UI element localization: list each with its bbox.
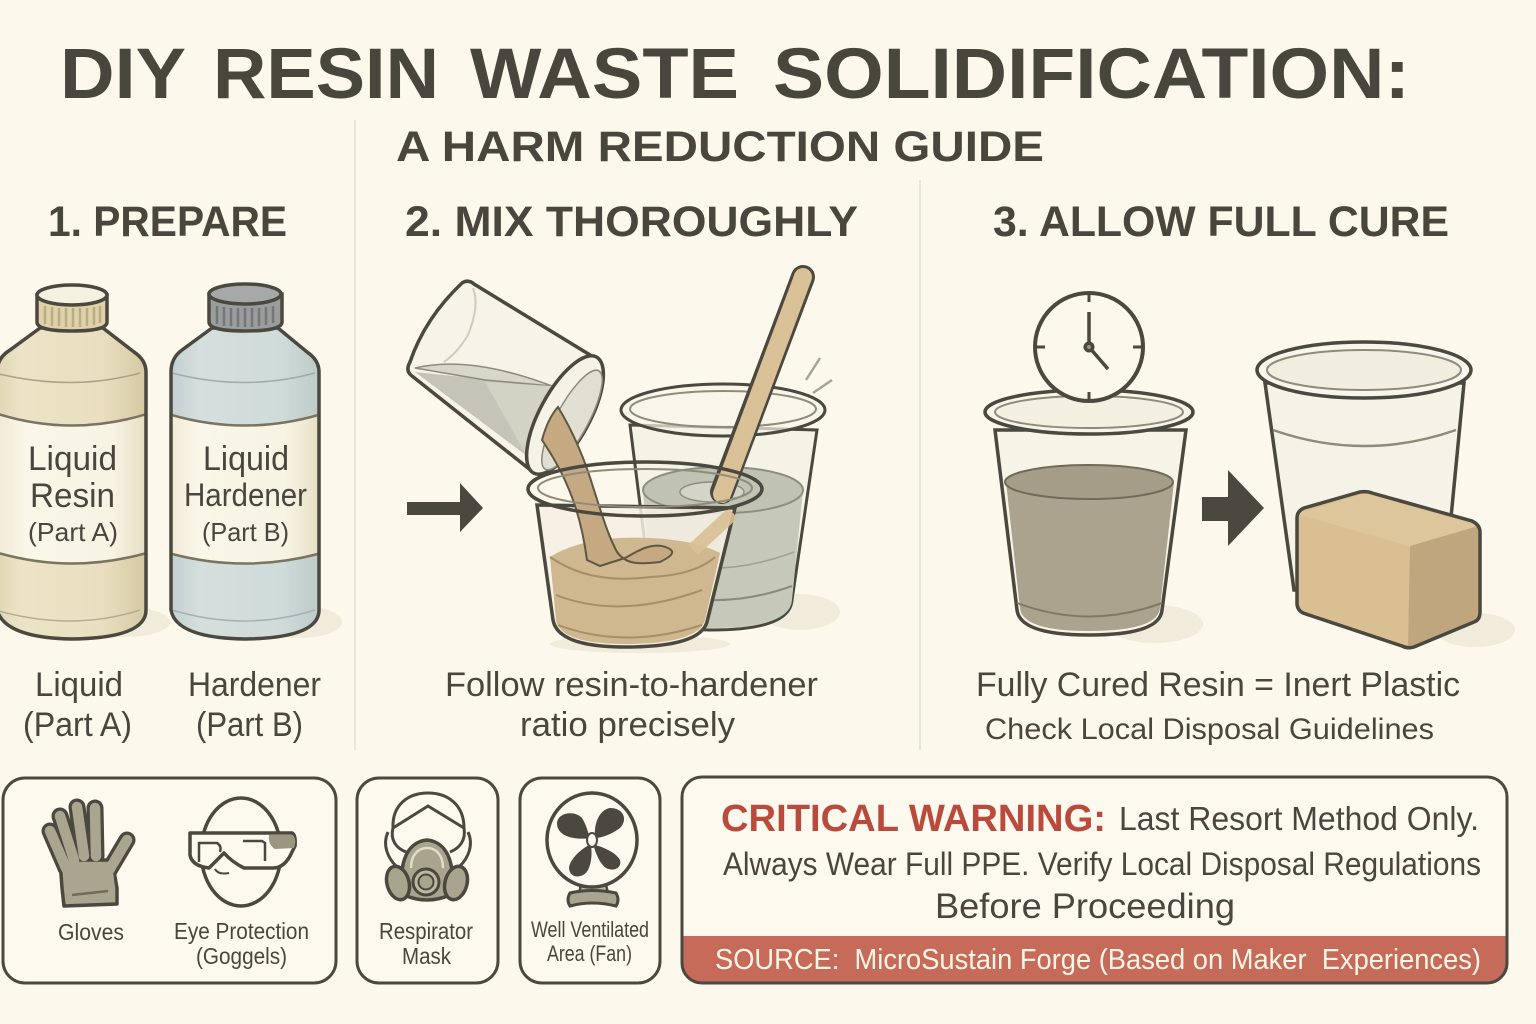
icon: respirator xyxy=(383,793,471,902)
cured block xyxy=(1297,492,1480,648)
icon: hardener bottle xyxy=(165,284,342,639)
caption: hardener part B xyxy=(188,666,321,744)
caption: liquid part A: Liquid xyxy=(35,666,123,704)
panel: ventilation fan xyxy=(520,778,660,983)
label: well ventilated area: Well Ventilated xyxy=(531,917,649,942)
warning heading: CRITICAL WARNING: xyxy=(721,798,1106,840)
icon: resin bottle xyxy=(0,285,170,639)
front cup rim xyxy=(528,462,762,516)
caption: mix ratio: Follow resin-to-hardener xyxy=(445,666,818,704)
label: resin bottle xyxy=(28,440,118,547)
warning line 1: Last Resort Method Only. xyxy=(1119,800,1479,837)
source text: SOURCE: MicroSustain Forge (Based on Maker Experiences) xyxy=(715,944,1481,976)
icon: mixing cups and stick xyxy=(408,277,840,653)
panel: critical warning xyxy=(682,777,1507,983)
label: hardener bottle: Liquid xyxy=(203,440,289,478)
label: hardener bottle xyxy=(184,440,307,547)
icon: glove xyxy=(50,807,127,906)
title: WASTE xyxy=(470,35,739,114)
label: eye protection xyxy=(174,918,309,969)
label: eye protection: (Goggels) xyxy=(196,943,287,969)
pouring stream xyxy=(542,407,672,566)
panel: respirator mask xyxy=(357,778,498,983)
caption: hardener part B: Hardener xyxy=(188,666,321,704)
caption: mix ratio: ratio precisely xyxy=(520,706,735,744)
caption: cured resin xyxy=(976,666,1460,746)
title: RESIN xyxy=(213,35,439,114)
caption: cured resin: Fully Cured Resin = Inert Plastic xyxy=(976,666,1460,704)
label: resin bottle: Resin xyxy=(30,477,115,515)
panel: step 1 prepare xyxy=(0,198,342,744)
icon: goggles on head xyxy=(190,798,295,906)
warning line 3: Before Proceeding xyxy=(935,887,1235,926)
heading: step 3: 3. ALLOW FULL CURE xyxy=(993,198,1449,246)
label: hardener bottle: Hardener xyxy=(184,477,307,513)
icon: curing cup xyxy=(985,390,1203,643)
warning line 2: Always Wear Full PPE. Verify Local Disposal Regulations xyxy=(723,846,1481,882)
icon: clock xyxy=(1034,292,1144,402)
caption: liquid part A: (Part A) xyxy=(23,706,132,744)
heading: step 1: 1. PREPARE xyxy=(48,198,287,246)
caption: cured resin: Check Local Disposal Guidelines xyxy=(985,713,1434,746)
title: SOLIDIFICATION: xyxy=(773,35,1410,114)
caption: mix ratio xyxy=(445,666,818,744)
icon: clear cup and cured block xyxy=(1257,342,1515,648)
arrow: cured result xyxy=(1202,470,1264,546)
title: DIY xyxy=(60,35,186,114)
label: resin bottle: (Part A) xyxy=(28,517,118,547)
label: resin bottle: Liquid xyxy=(28,440,117,478)
panel: gloves and goggles xyxy=(3,778,336,983)
heading: step 2: 2. MIX THOROUGHLY xyxy=(405,198,858,246)
panel: step 2 mix xyxy=(405,198,858,744)
label: well ventilated area: Area (Fan) xyxy=(547,941,632,966)
label: respirator mask: Mask xyxy=(402,943,451,969)
stirring stick xyxy=(680,277,803,502)
title xyxy=(60,35,1410,114)
motion marks xyxy=(806,358,832,393)
subtitle: A HARM REDUCTION GUIDE xyxy=(396,123,1044,171)
label: respirator mask xyxy=(379,918,473,969)
label: respirator mask: Respirator xyxy=(379,918,473,944)
source banner xyxy=(682,936,1507,983)
caption: liquid part A xyxy=(23,666,132,744)
caption: hardener part B: (Part B) xyxy=(196,706,303,744)
tilted pouring cup xyxy=(408,281,618,485)
label: gloves: Gloves xyxy=(58,919,124,945)
icon: fan xyxy=(547,793,637,906)
label: eye protection: Eye Protection xyxy=(174,918,309,944)
arrow: into mixing xyxy=(407,483,483,532)
label: hardener bottle: (Part B) xyxy=(202,517,289,547)
front cup body xyxy=(537,505,735,647)
back cup xyxy=(621,384,825,630)
label: well ventilated area xyxy=(531,917,649,966)
panel: step 3 cure xyxy=(976,198,1515,746)
